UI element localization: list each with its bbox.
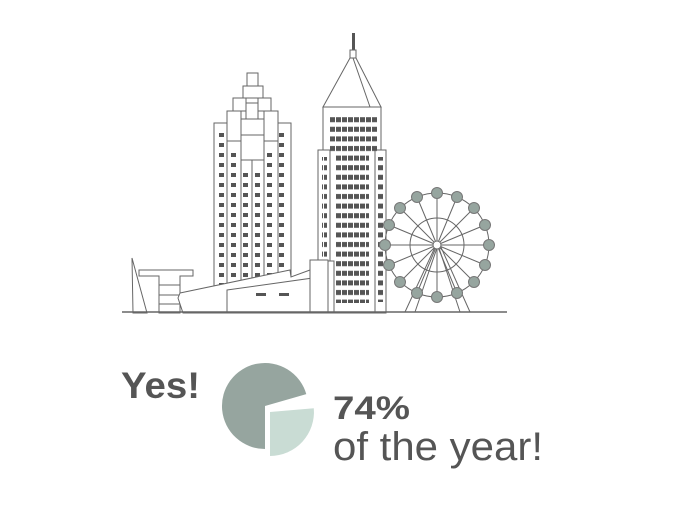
ground line (122, 311, 507, 313)
right tower building (318, 33, 386, 313)
icon: ferris wheel (380, 188, 494, 312)
text: 74%: 74% (333, 390, 410, 426)
low buildings (132, 258, 334, 313)
left tower building (214, 73, 291, 313)
pie chart (222, 363, 314, 456)
text: Yes!: Yes! (121, 365, 200, 406)
text: of the year!: of the year! (333, 425, 543, 469)
skyline illustration (132, 33, 386, 313)
